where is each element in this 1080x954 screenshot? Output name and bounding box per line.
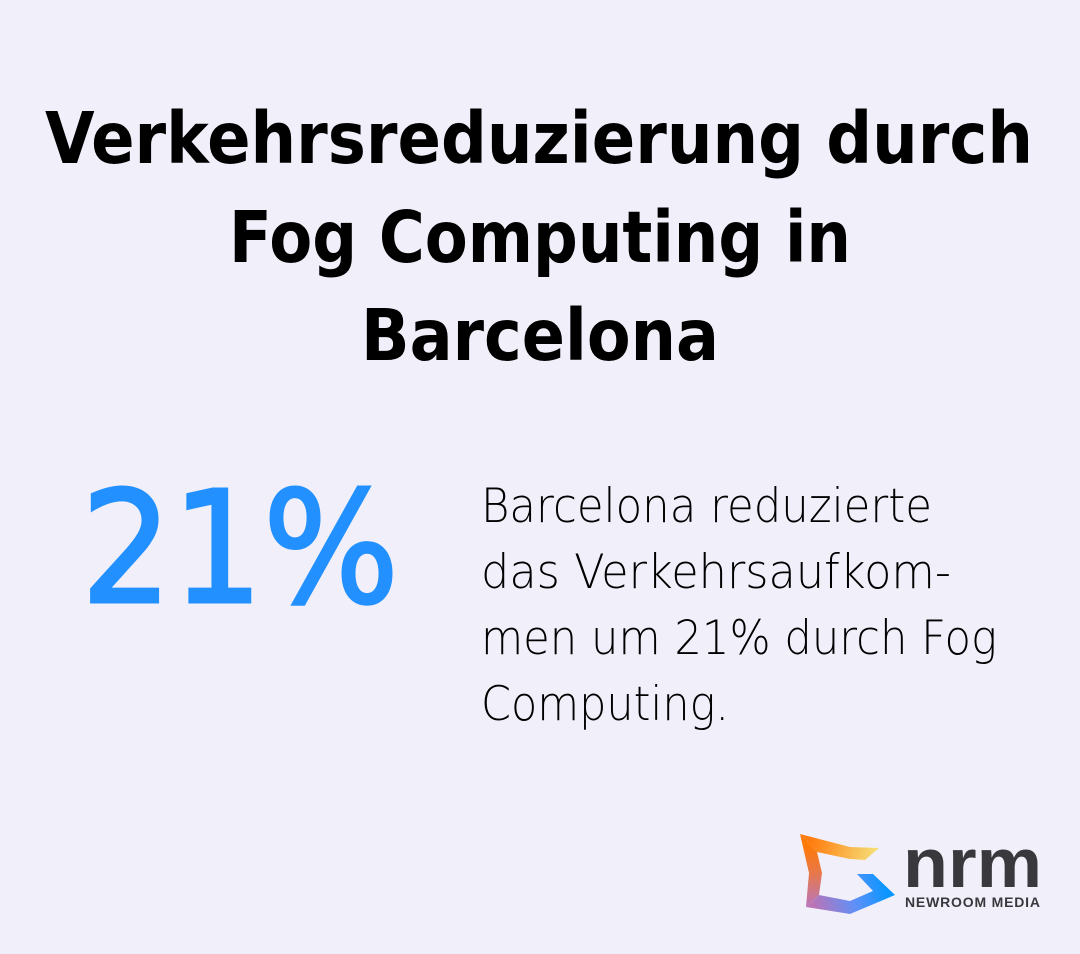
description text: Barcelona reduzierte xyxy=(481,479,932,534)
description text xyxy=(481,479,997,732)
logo tagline: NEWROOM MEDIA xyxy=(905,894,1040,910)
logo mark xyxy=(800,834,895,914)
logo wordmark: nrm xyxy=(903,824,1042,902)
big stat: 21%: 21% xyxy=(81,458,399,639)
description text: men um 21% durch Fog xyxy=(481,611,997,666)
title: Barcelona xyxy=(361,294,719,377)
title xyxy=(45,97,1033,377)
title: Fog Computing in xyxy=(229,196,851,279)
description text: das Verkehrsaufkom- xyxy=(481,545,951,600)
logo: Newroom Media xyxy=(800,824,1042,914)
description text: Computing. xyxy=(481,677,729,732)
